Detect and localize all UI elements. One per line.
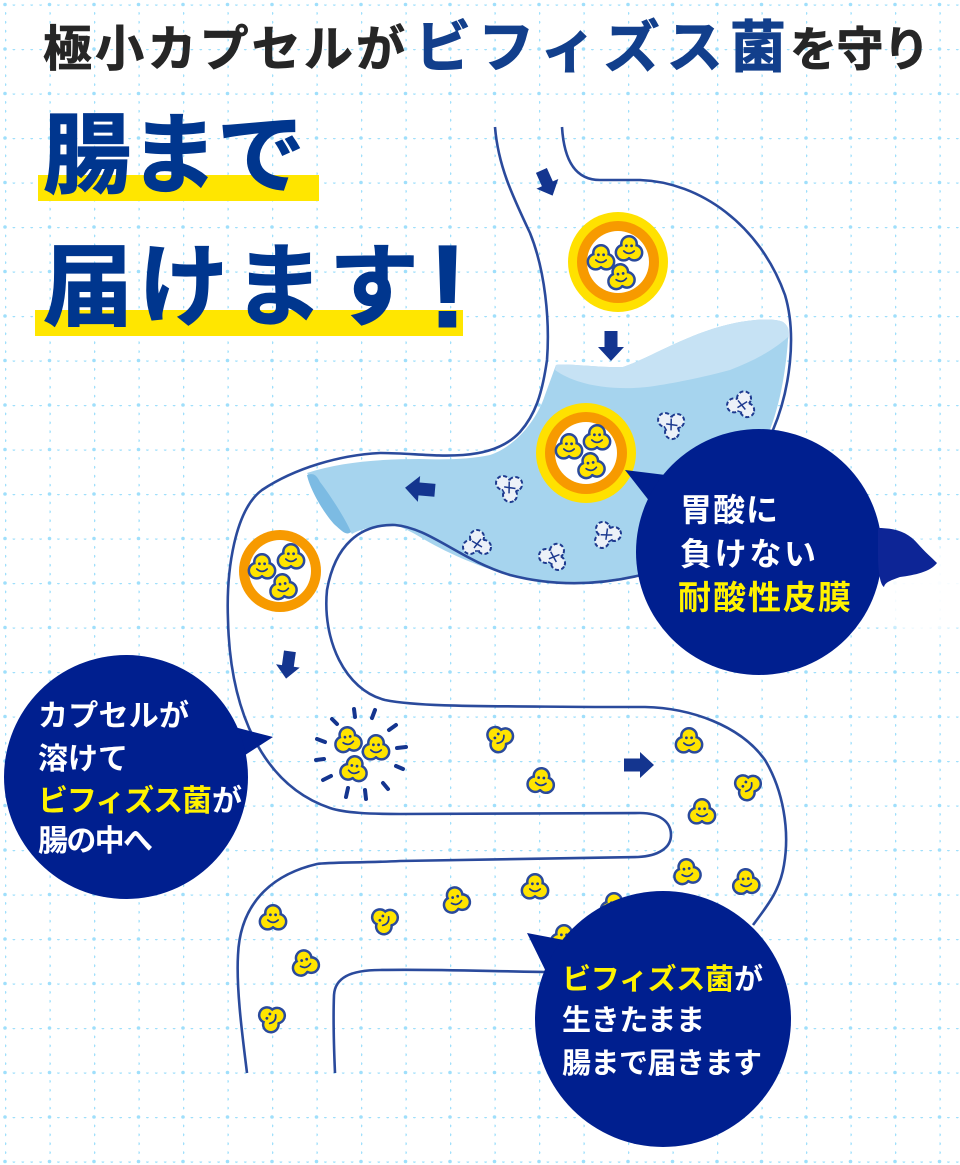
callout: reach intestine alive — [527, 891, 791, 1147]
callout: reach intestine alive: 生きたまま — [562, 1004, 705, 1037]
title line: 極小カプセルが — [43, 23, 405, 77]
stomach acid water — [307, 319, 789, 582]
callout tail blob — [878, 528, 937, 587]
callout: capsule dissolves: 腸の中へ — [38, 825, 153, 858]
capsule in esophagus — [568, 212, 668, 312]
callout: reach intestine alive: が — [734, 962, 763, 996]
callout: acid-resistant coating: 耐酸性皮膜 — [678, 579, 851, 616]
callout: capsule dissolves: カプセルが — [38, 699, 189, 733]
capsule in duodenum — [239, 530, 321, 612]
title line: ビフィズス菌 — [415, 16, 786, 79]
callout: capsule dissolves: ビフィズス菌 — [38, 784, 212, 818]
callout: capsule dissolves: が — [212, 784, 242, 818]
callout: capsule dissolves — [4, 655, 273, 899]
released bacteria in intestine — [255, 721, 762, 1034]
capsule in stomach — [536, 403, 636, 503]
heading: 届けます!: ! — [428, 221, 467, 353]
heading: 届けます! — [35, 221, 467, 353]
callout: reach intestine alive: ビフィズス菌 — [562, 962, 734, 996]
dissolving bacteria in acid — [463, 387, 760, 573]
bursting bacteria — [316, 709, 406, 799]
digestive tract outline — [228, 127, 791, 1073]
fade patch right of bubble — [865, 535, 960, 645]
callout: acid-resistant coating: 胃酸に — [680, 492, 778, 528]
callout: acid-resistant coating — [625, 429, 937, 675]
heading: 腸まで: 腸まで — [43, 106, 305, 205]
title line — [43, 16, 930, 79]
title line: を守り — [790, 23, 930, 76]
arrows — [274, 166, 654, 778]
callout: reach intestine alive: 腸まで届きます — [562, 1048, 762, 1080]
callout: acid-resistant coating: 負けない — [680, 536, 816, 572]
callout: capsule dissolves: 溶けて — [38, 743, 128, 776]
heading: 届けます!: 届けます — [43, 238, 419, 338]
